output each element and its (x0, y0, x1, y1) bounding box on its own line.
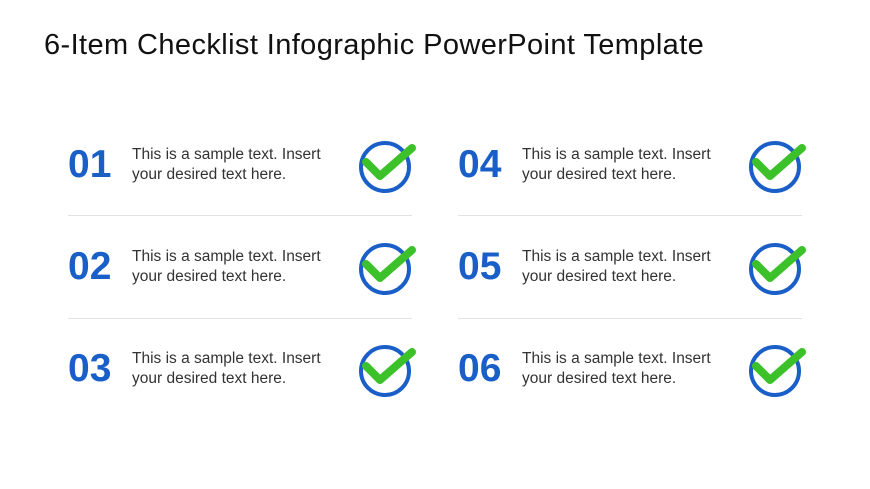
item 05: 05 (458, 245, 501, 288)
item 03: This is a sample text. Insert (132, 350, 321, 367)
item 06: your desired text here. (522, 370, 676, 387)
item 01: This is a sample text. Insert (132, 146, 321, 163)
item 03: your desired text here. (132, 370, 286, 387)
item 03: 03 (68, 347, 111, 390)
item 02: your desired text here. (132, 268, 286, 285)
item 02 (68, 243, 416, 295)
item 05 (458, 243, 806, 295)
item 06: This is a sample text. Insert (522, 350, 711, 367)
item 02: This is a sample text. Insert (132, 248, 321, 265)
item 04 (458, 141, 806, 193)
item 01 (68, 141, 416, 193)
item 03 (68, 345, 416, 397)
item 04: your desired text here. (522, 166, 676, 183)
item 05: This is a sample text. Insert (522, 248, 711, 265)
item 02: 02 (68, 245, 111, 288)
item 06 (458, 345, 806, 397)
item 04: 04 (458, 143, 501, 186)
item 06: 06 (458, 347, 501, 390)
item 05: your desired text here. (522, 268, 676, 285)
item 01: 01 (68, 143, 111, 186)
item 04: This is a sample text. Insert (522, 146, 711, 163)
title: 6-Item Checklist Infographic PowerPoint Template (44, 29, 704, 61)
item 01: your desired text here. (132, 166, 286, 183)
